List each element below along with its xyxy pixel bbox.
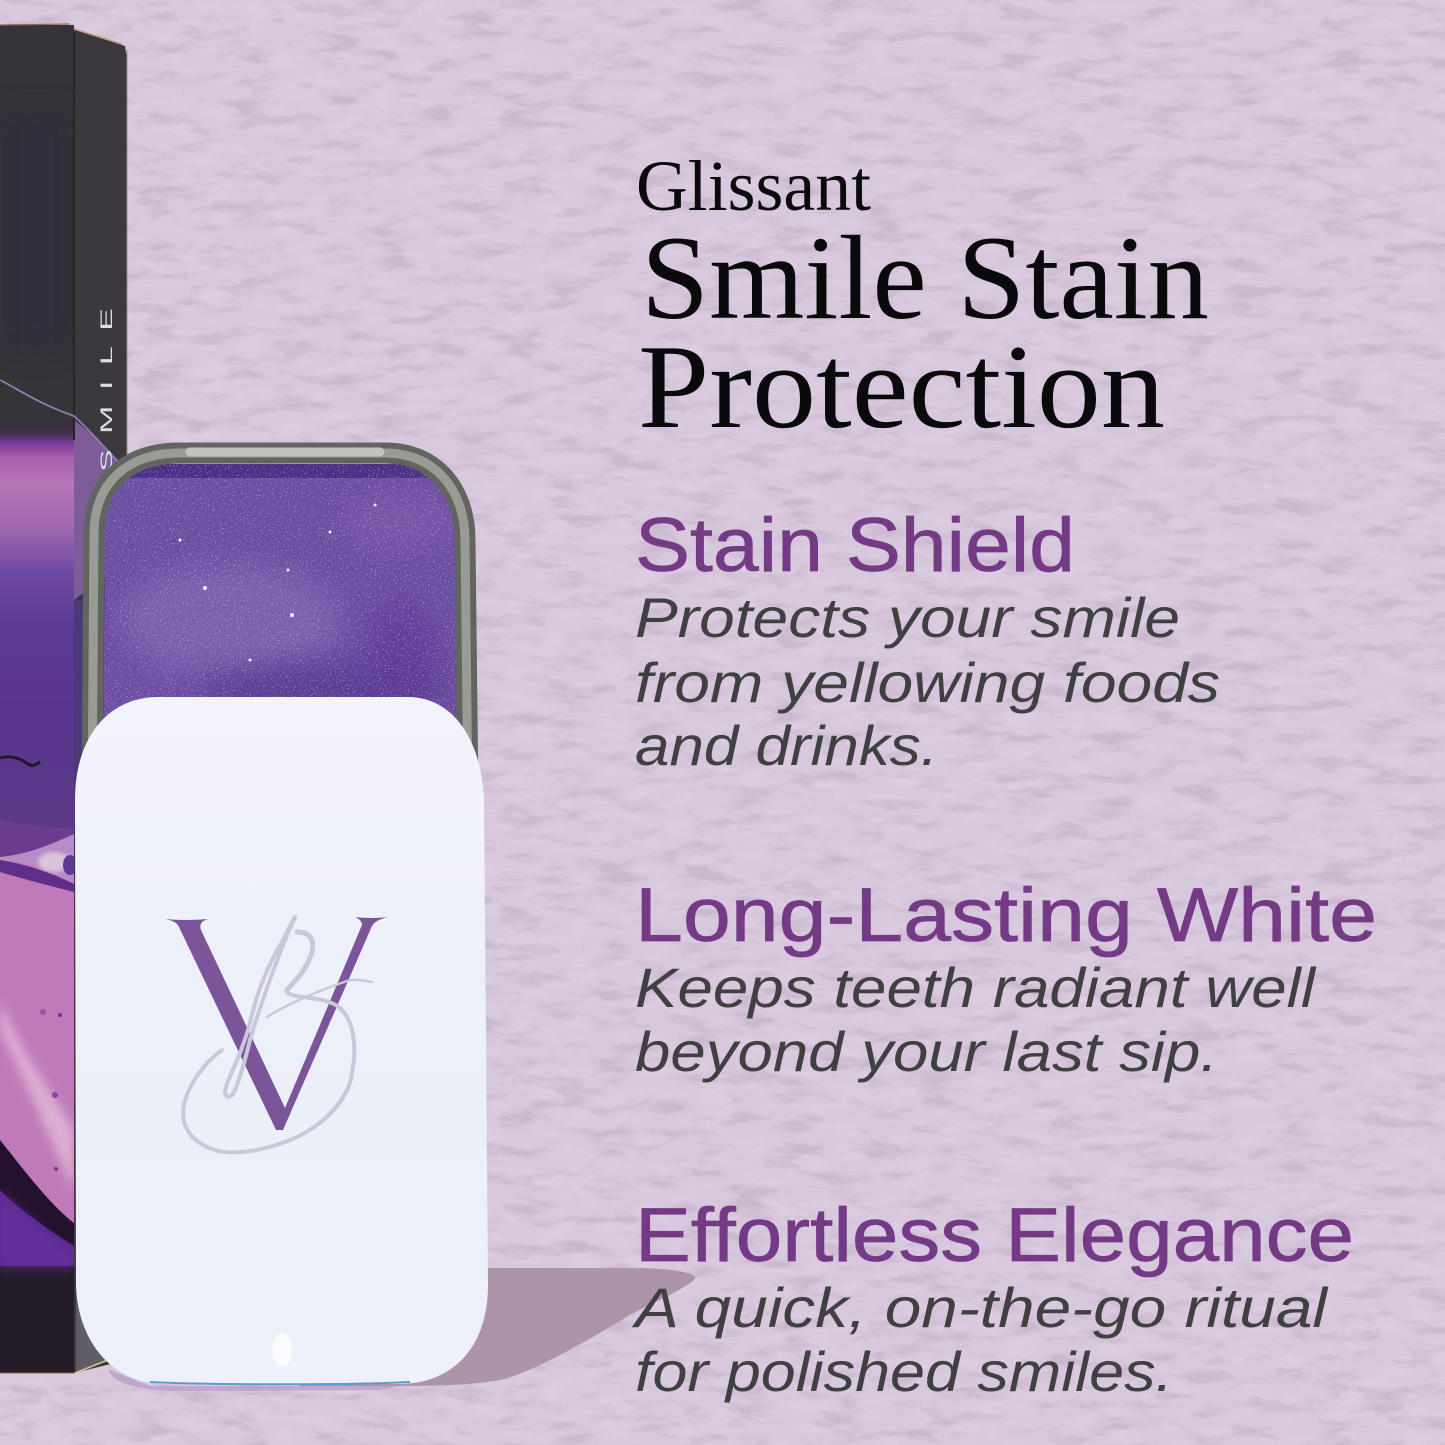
product box <box>0 24 127 1374</box>
slide tin with purple balm <box>92 452 468 805</box>
box side text: SMILE: SMILE <box>97 293 116 472</box>
box front face with marble artwork <box>0 25 77 1374</box>
benefit: Effortless Elegance: Effortless Elegance <box>635 1193 1354 1278</box>
title: Smile Stain <box>641 211 1209 344</box>
benefit: Stain Shield: and drinks. <box>635 714 938 777</box>
white sliding lid <box>75 697 488 1384</box>
benefit: Effortless Elegance <box>631 1193 1354 1403</box>
title: Protection <box>638 320 1165 453</box>
benefit: Stain Shield: from yellowing foods <box>635 651 1220 714</box>
benefit: Long-Lasting White <box>635 873 1377 1083</box>
benefit: Long-Lasting White: Long-Lasting White <box>635 873 1377 958</box>
title <box>636 146 1209 453</box>
metal rim <box>92 453 468 800</box>
cast shadow of tin <box>108 1268 695 1391</box>
benefit: Stain Shield: Stain Shield <box>635 503 1075 588</box>
title: Glissant <box>636 146 871 226</box>
benefit: Long-Lasting White: Keeps teeth radiant well <box>635 956 1317 1019</box>
benefit: Effortless Elegance: for polished smiles. <box>635 1340 1173 1403</box>
benefit: Stain Shield <box>635 503 1220 777</box>
logo monogram VB <box>165 917 388 1152</box>
box side face <box>74 29 127 1373</box>
benefit: Long-Lasting White: beyond your last sip. <box>635 1020 1218 1083</box>
balm <box>104 464 457 720</box>
benefit: Effortless Elegance: A quick, on-the-go ritual <box>631 1276 1329 1339</box>
benefit: Stain Shield: Protects your smile <box>635 586 1180 649</box>
